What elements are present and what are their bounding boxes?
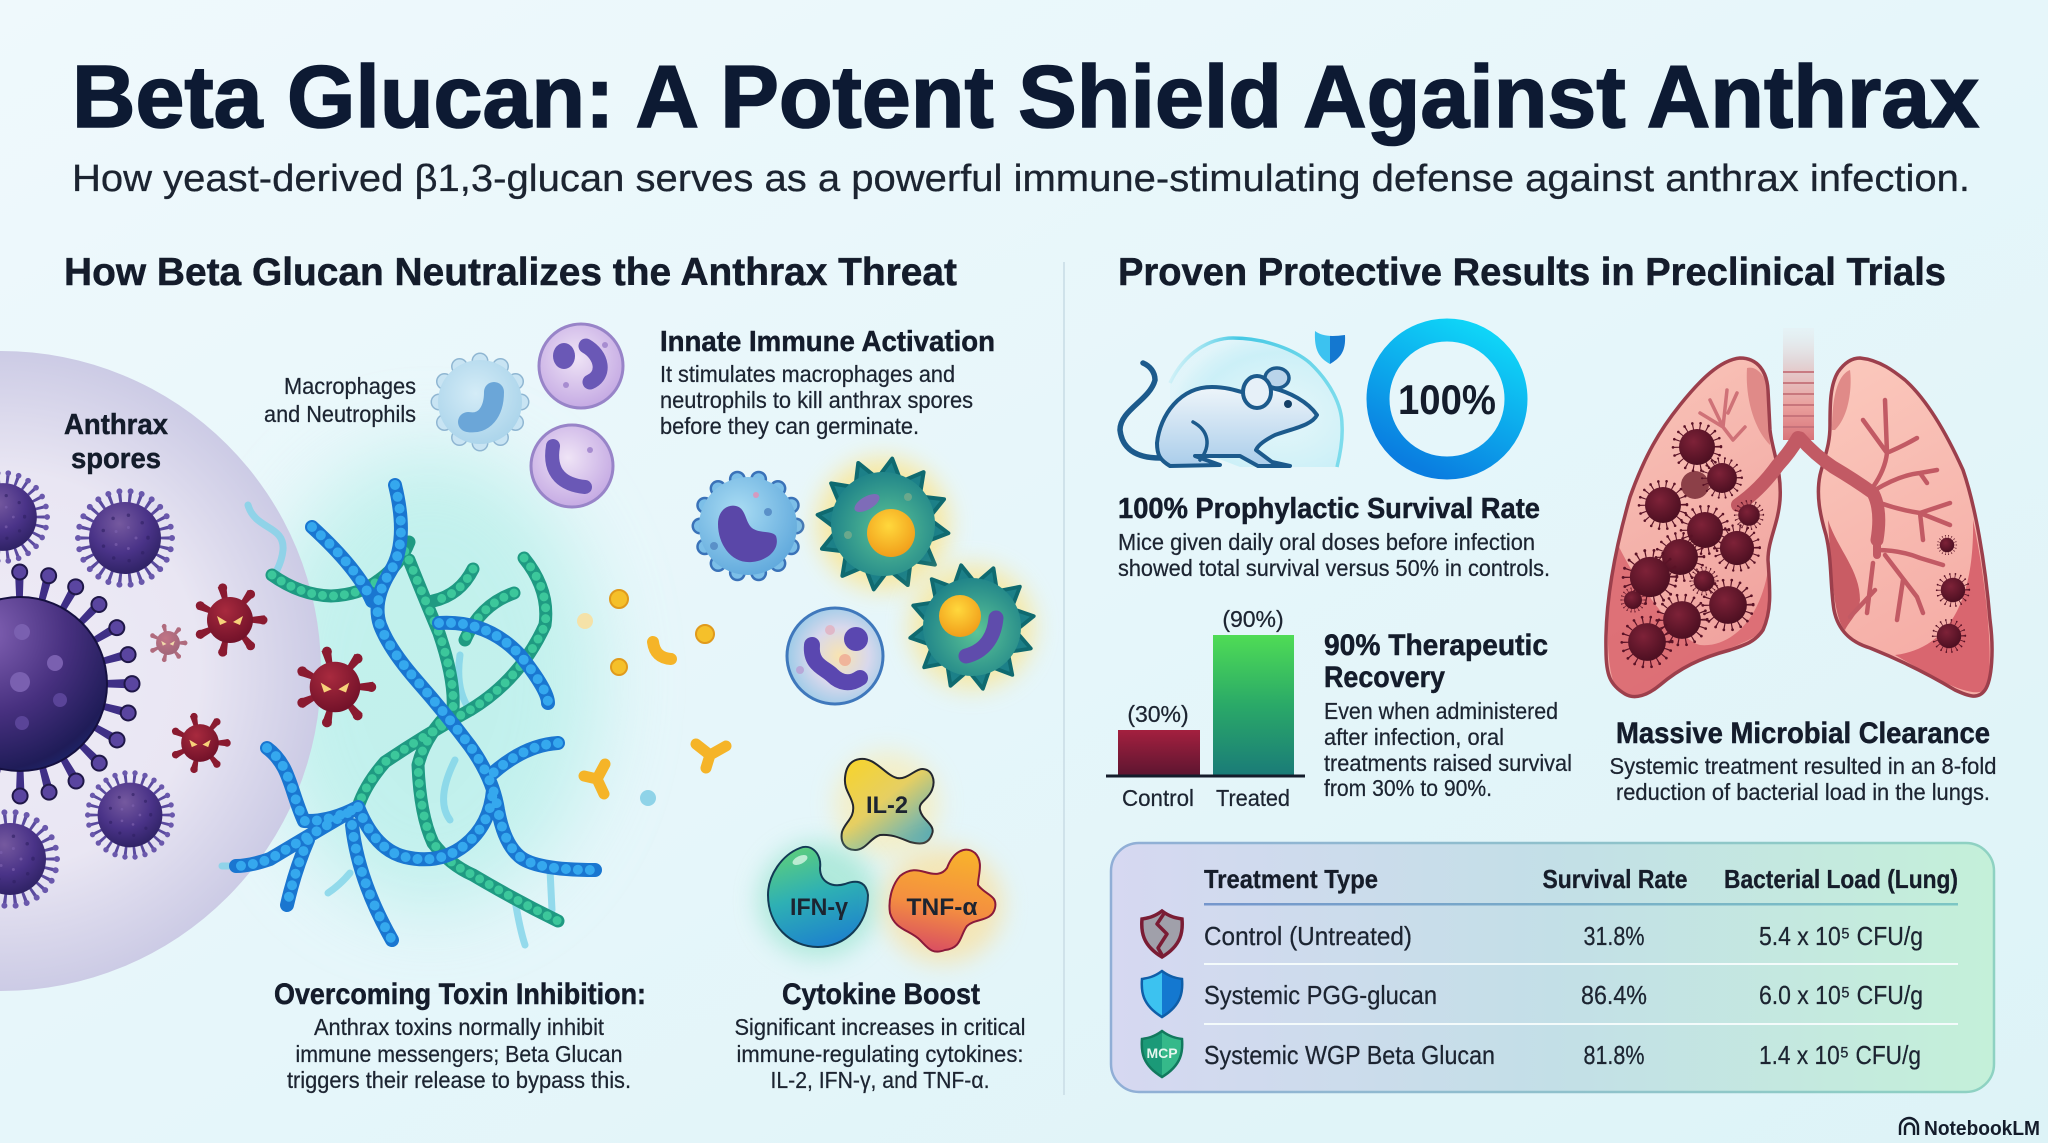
chart: 100 percent ring — [1378, 330, 1516, 468]
text: cytokine boost: immune-regulating cytokines: — [736, 1041, 1024, 1067]
text: overcoming toxin inhibition: Overcoming Toxin Inhibition: — [274, 978, 646, 1011]
icon: blue shield — [1142, 971, 1182, 1017]
title: Beta Glucan: A Potent Shield Against Anthrax — [72, 47, 1979, 146]
table header: Survival Rate — [1542, 864, 1688, 894]
icon: broken shield — [1142, 911, 1182, 957]
icon: green MCP shield — [1142, 1031, 1182, 1077]
chart: control vs treated survival: Treated — [1216, 785, 1290, 811]
text: overcoming toxin inhibition: Anthrax toxins normally inhibit — [314, 1014, 605, 1040]
icon: TNF-alpha cytokine — [883, 847, 1003, 963]
cytokine particles — [577, 590, 726, 806]
text: massive microbial clearance: Massive Microbial Clearance — [1616, 717, 1990, 750]
table row: systemic PGG-glucan: Systemic PGG-glucan — [1204, 980, 1437, 1010]
text: massive microbial clearance — [1610, 717, 1996, 805]
table row: systemic WGP beta glucan: Systemic WGP Beta Glucan — [1204, 1040, 1495, 1070]
text: prophylactic survival: Mice given daily oral doses before infection — [1118, 529, 1535, 555]
table row: systemic PGG-glucan: 6.0 x 10⁵ CFU/g — [1759, 980, 1923, 1010]
label: innate immune activation: Innate Immune Activation — [660, 326, 995, 358]
label: anthrax spores — [64, 409, 168, 475]
spore zone disc — [0, 351, 321, 991]
bronchi — [1700, 390, 1950, 620]
chart: 100 percent ring: 100% — [1398, 376, 1496, 423]
icon: infected lungs — [1606, 328, 1992, 697]
text: massive microbial clearance: Systemic treatment resulted in an 8-fold — [1610, 753, 1996, 779]
bacteria in lungs — [1621, 423, 1969, 667]
text: therapeutic recovery: treatments raised survival — [1324, 750, 1572, 776]
left panel heading: How Beta Glucan Neutralizes the Anthrax Threat — [64, 251, 957, 294]
table header: Treatment Type — [1204, 864, 1378, 894]
label: innate immune activation: before they can germinate. — [660, 413, 919, 439]
subtitle: How yeast-derived β1,3-glucan serves as a powerful immune-stimulating defense against anthrax infection. — [72, 158, 1970, 200]
table row: systemic PGG-glucan — [1204, 980, 1923, 1010]
text: cytokine boost: Cytokine Boost — [782, 978, 980, 1011]
table row: control — [1204, 921, 1923, 951]
table row: control: 5.4 x 10⁵ CFU/g — [1759, 921, 1923, 951]
icon: neutrophil lower — [531, 425, 613, 507]
icon: activated macrophage blue — [699, 477, 797, 575]
text: massive microbial clearance: reduction of bacterial load in the lungs. — [1616, 779, 1990, 805]
text: cytokine boost: Significant increases in critical — [734, 1014, 1026, 1040]
text: prophylactic survival: showed total survival versus 50% in controls. — [1118, 555, 1550, 581]
text: prophylactic survival — [1118, 493, 1550, 581]
teal glow behind fibres — [260, 450, 600, 910]
chart: control vs treated survival: (90%) — [1222, 606, 1284, 632]
icon: red toxins — [151, 587, 371, 770]
text: therapeutic recovery: Even when administered — [1324, 698, 1558, 724]
right panel heading: Proven Protective Results in Preclinical Trials — [1118, 251, 1946, 294]
panel: how beta glucan neutralizes the threat — [0, 251, 1045, 1093]
chart: control vs treated survival: (30%) — [1127, 701, 1189, 727]
icon: small anthrax spores — [0, 473, 172, 906]
text: overcoming toxin inhibition: immune messengers; Beta Glucan — [296, 1041, 622, 1067]
beta glucan fibres — [222, 485, 595, 945]
icon: IFN-gamma cytokine: IFN-γ — [790, 894, 849, 921]
icon: green MCP shield: MCP — [1146, 1045, 1178, 1061]
icon: activated green cell lower — [899, 554, 1045, 700]
table row: control: 31.8% — [1584, 921, 1644, 951]
label: anthrax spores: Anthrax — [64, 409, 168, 441]
icon: IFN-gamma cytokine — [758, 842, 878, 958]
label: macrophages and neutrophils — [264, 373, 416, 427]
chart: control vs treated survival — [1106, 606, 1305, 811]
table header — [1204, 864, 1958, 894]
text: prophylactic survival: 100% Prophylactic Survival Rate — [1118, 493, 1540, 525]
table: treatment comparison — [1111, 843, 1994, 1092]
icon: TNF-alpha cytokine: TNF-α — [906, 894, 978, 921]
text: overcoming toxin inhibition: triggers their release to bypass this. — [287, 1067, 631, 1093]
table row: systemic PGG-glucan: 86.4% — [1581, 980, 1647, 1010]
table row: control: Control (Untreated) — [1204, 921, 1412, 951]
table row: systemic WGP beta glucan: 81.8% — [1584, 1040, 1644, 1070]
label: innate immune activation: neutrophils to kill anthrax spores — [660, 387, 973, 413]
icon: activated green cell upper — [808, 449, 958, 599]
icon: IL-2 cytokine — [835, 752, 939, 856]
text: therapeutic recovery: from 30% to 90%. — [1324, 775, 1492, 801]
text: cytokine boost: IL-2, IFN-γ, and TNF-α. — [770, 1067, 990, 1093]
table row: systemic WGP beta glucan — [1204, 1040, 1921, 1070]
text: cytokine boost — [734, 978, 1026, 1093]
icon: IL-2 cytokine: IL-2 — [866, 792, 908, 819]
icon: protected mouse — [1120, 331, 1345, 467]
table header: Bacterial Load (Lung) — [1724, 864, 1958, 894]
icon: neutrophil upper — [539, 324, 623, 408]
table row: systemic WGP beta glucan: 1.4 x 10⁵ CFU/g — [1759, 1040, 1921, 1070]
text: therapeutic recovery: 90% Therapeutic — [1324, 629, 1548, 662]
NotebookLM logo: NotebookLM — [1924, 1118, 2040, 1140]
label: anthrax spores: spores — [71, 443, 161, 475]
icon: macrophage pale — [438, 360, 522, 444]
label: innate immune activation: It stimulates macrophages and — [660, 361, 955, 387]
text: therapeutic recovery — [1324, 629, 1572, 801]
chart: control vs treated survival: Control — [1122, 785, 1194, 811]
text: therapeutic recovery: after infection, oral — [1324, 724, 1504, 750]
label: macrophages and neutrophils: and Neutrophils — [264, 401, 416, 427]
panel: proven protective results — [1106, 251, 1996, 1092]
icon: activated neutrophil — [787, 608, 883, 704]
label: macrophages and neutrophils: Macrophages — [284, 373, 416, 399]
label: innate immune activation — [660, 326, 995, 439]
icon: large anthrax spore — [0, 572, 132, 796]
text: therapeutic recovery: Recovery — [1324, 661, 1445, 694]
text: overcoming toxin inhibition — [274, 978, 646, 1093]
